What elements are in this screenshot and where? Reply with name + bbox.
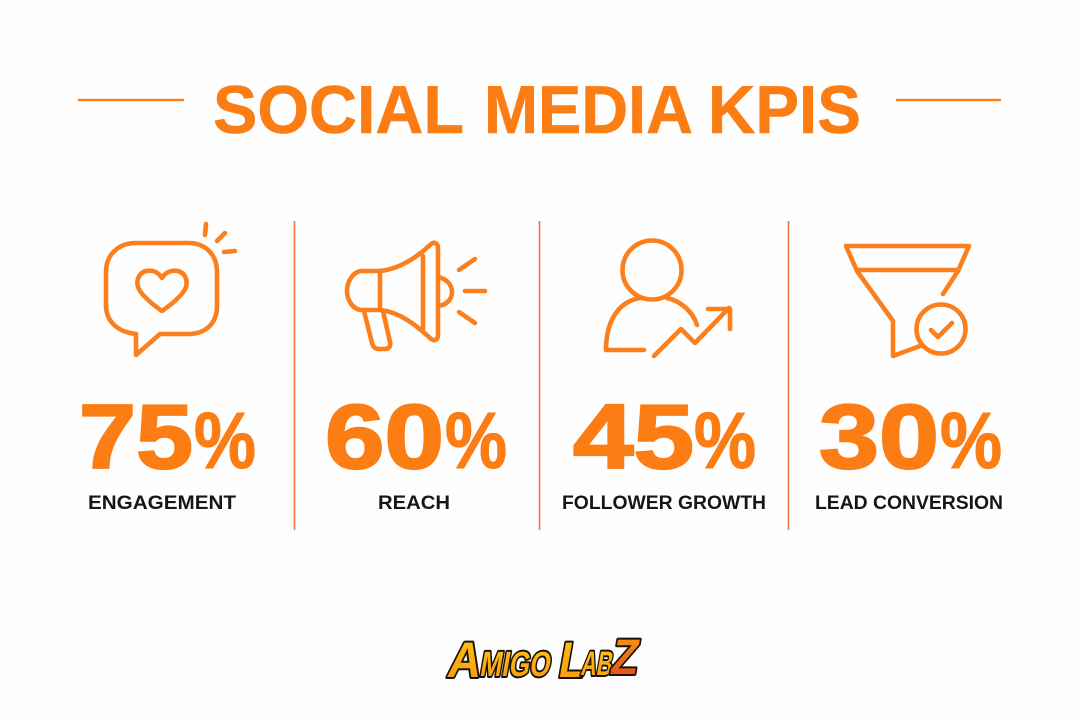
logo: Amigo Labz: Z <box>607 628 644 685</box>
title <box>78 72 1001 148</box>
label: engagement: ENGAGEMENT <box>88 492 236 514</box>
label: follower growth: FOLLOWER GROWTH <box>562 492 766 514</box>
stat: 60%: % <box>445 396 507 485</box>
stat: 75%: % <box>194 396 256 485</box>
icon: funnel with check <box>846 246 969 356</box>
divider 2 <box>538 221 540 530</box>
stat: 60% <box>325 387 507 488</box>
logo: Amigo Labz: L <box>555 631 591 688</box>
logo: Amigo Labz <box>444 628 644 688</box>
stat: 30%: % <box>940 396 1002 485</box>
logo: Amigo Labz: MIGO <box>478 645 554 684</box>
label: reach: REACH <box>378 492 450 514</box>
title: MEDIA <box>484 72 693 148</box>
title: SOCIAL <box>213 72 464 148</box>
label: lead conversion: LEAD CONVERSION <box>815 492 1003 514</box>
divider 1 <box>294 221 296 530</box>
icon: person with growth arrow <box>606 240 730 356</box>
stat: 45%: 45 <box>573 387 694 488</box>
stat: 30%: 30 <box>819 387 939 488</box>
stat: 45%: % <box>694 396 756 485</box>
stat: 45% <box>573 387 756 488</box>
stat: 75% <box>79 387 256 488</box>
stat: 60%: 60 <box>325 387 444 488</box>
logo: Amigo Labz: A <box>444 631 487 688</box>
icon: megaphone <box>347 243 485 349</box>
icon: speech bubble with heart <box>106 224 235 355</box>
divider 3 <box>788 221 790 530</box>
stat: 30% <box>819 387 1002 488</box>
logo: Amigo Labz: AB <box>579 645 616 683</box>
title: KPIS <box>708 72 861 148</box>
stat: 75%: 75 <box>79 387 193 488</box>
